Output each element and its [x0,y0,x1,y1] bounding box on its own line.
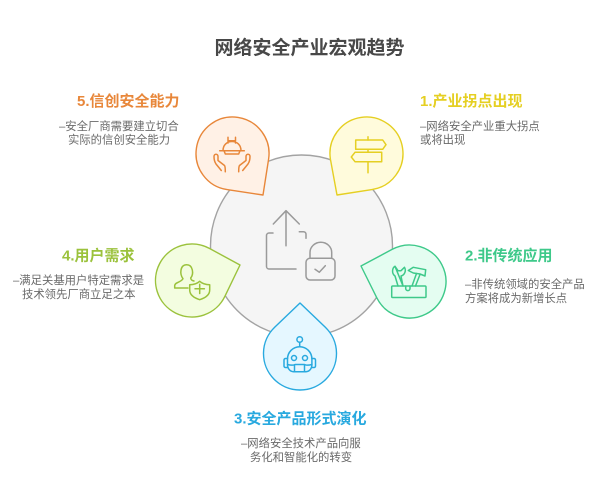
text block: 3: –网络安全技术产品向服 [241,436,361,450]
text block: 1 [420,92,540,146]
text block: 3: 务化和智能化的转变 [250,450,352,464]
text block: 3 [234,410,367,464]
text block: 5: –安全厂商需要建立切合 [59,119,179,133]
icon: upload and lock [266,211,335,280]
icon: user with shield [175,265,210,300]
icon: helmet and hands [214,137,250,172]
panel: 4 lime drop [156,244,240,317]
panel: 2 green drop [361,245,446,318]
text block: 2: –非传统领域的安全产品 [465,277,585,291]
icon: signpost [351,137,386,173]
text block: 4: 4.用户需求 [62,246,135,264]
text block: 1: 1.产业拐点出现 [420,92,523,110]
panel: 3 blue drop [264,303,337,390]
text block: 2: 2.非传统应用 [465,246,553,264]
text block: 1: –网络安全产业重大拐点 [420,119,540,133]
text block: 2 [465,246,585,305]
text block: 5: 实际的信创安全能力 [68,132,170,146]
text block: 1: 或将出现 [420,132,465,146]
icon: robot [284,337,316,372]
text block: 5 [59,92,180,146]
text block: 4 [13,246,144,301]
panel: central circle [210,155,392,337]
text block: 4: –满足关基用户特定需求是 [13,273,144,287]
text block: 2: 方案将成为新增长点 [465,291,567,305]
text block: 5: 5.信创安全能力 [77,92,180,110]
panel: 1 yellow drop [330,117,403,195]
text block: 3: 3.安全产品形式演化 [234,410,367,428]
panel: 5 orange drop [196,117,269,195]
icon: toolbox [392,266,426,298]
title: 网络安全产业宏观趋势 [214,36,405,59]
text block: 4: 技术领先厂商立足之本 [22,287,135,301]
